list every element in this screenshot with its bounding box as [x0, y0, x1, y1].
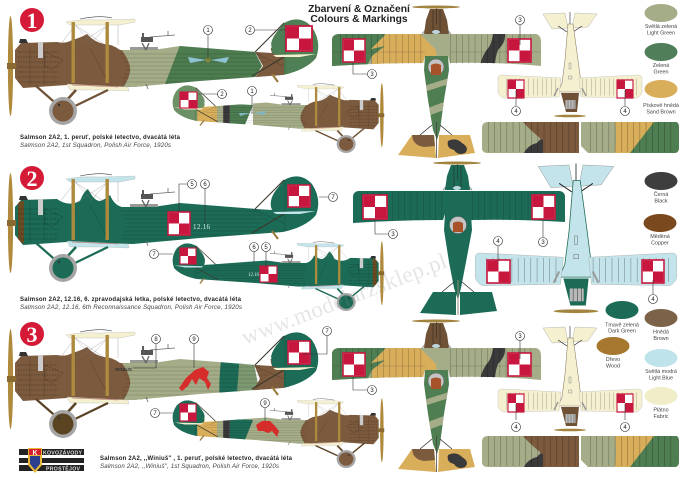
caption aircraft 1: [20, 135, 181, 149]
logo: Kovozávody Prostějov: [19, 448, 84, 473]
aircraft 1 top view: 3: [518, 18, 522, 24]
aircraft 1 insignia and callouts: [180, 26, 312, 116]
aircraft 3 small side view: [165, 394, 384, 468]
logo: Kovozávody Prostějov: KOVOZÁVODY: [43, 450, 83, 456]
colour swatches legend: Světlá modrá: [645, 369, 677, 375]
colour swatches legend: Sand Brown: [646, 110, 676, 116]
aircraft 1 insignia and callouts: 2: [220, 92, 224, 98]
colour swatches legend: Tmavě zelená: [605, 322, 639, 328]
caption aircraft 2: Salmson 2A2, 12.16, 6. zpravodajská letka, polské letectvo, dvacátá léta: [20, 297, 242, 303]
aircraft 2 small side view: [165, 237, 384, 311]
logo: Kovozávody Prostějov: K: [32, 450, 38, 457]
colour swatches legend: Světlá zelená: [645, 24, 677, 30]
aircraft 1 underside and wing panels: [482, 12, 679, 153]
caption aircraft 1: Salmson 2A2, 1st Squadron, Polish Air Force, 1920s: [20, 142, 171, 149]
colour swatches legend: Měděná: [650, 234, 670, 240]
aircraft 3 underside and wing panels: [482, 326, 679, 467]
aircraft 3 insignia: red bears and callouts: 7: [325, 329, 329, 335]
caption aircraft 3: Salmson 2A2, ,,Winiuš", 1st Squadron, Polish Air Force, 1920s: [100, 463, 279, 470]
aircraft 1 top view: 3: [370, 72, 374, 78]
watermark: www.modelarzsklep.pl: [238, 248, 450, 350]
colour swatches legend: Wood: [606, 364, 620, 370]
aircraft 2 insignia and callouts: 12.16: [193, 223, 210, 231]
colour swatches legend: Dark Green: [608, 328, 636, 334]
colour swatches legend: Pískově hnědá: [643, 103, 679, 109]
colour swatches legend: Copper: [651, 240, 669, 246]
colour swatches legend: Black: [654, 198, 668, 204]
aircraft 3 insignia: red bears and callouts: WINIUS: [115, 367, 132, 372]
aircraft 3 insignia: red bears and callouts: 9: [192, 337, 196, 343]
colour swatches legend: Hnědá: [653, 330, 669, 336]
caption aircraft 1: Salmson 2A2, 1. peruť, polské letectvo, dvacátá léta: [20, 135, 181, 141]
aircraft 3 insignia: red bears and callouts: 7: [153, 411, 157, 417]
aircraft 3 top view: 3: [370, 388, 374, 394]
badge: number 1: [20, 8, 44, 33]
colour swatches legend: Černá: [654, 191, 668, 198]
badge: number 3: 3: [26, 322, 38, 347]
aircraft 1 side view: [7, 10, 330, 125]
aircraft 3 insignia: red bears and callouts: 8: [154, 337, 158, 343]
aircraft 3 underside and wing panels: 4: [623, 425, 627, 431]
aircraft 3 insignia: red bears and callouts: 9: [263, 401, 267, 407]
colour swatches legend: [596, 4, 679, 420]
colour swatches legend: Zelená: [653, 63, 669, 69]
badge: number 2: 2: [26, 166, 38, 191]
colour swatches legend: Light Green: [647, 30, 675, 36]
aircraft 2 insignia and callouts: 6: [252, 245, 256, 251]
aircraft 2 insignia and callouts: 6: [203, 182, 207, 188]
logo: Kovozávody Prostějov: PROSTĚJOV: [46, 464, 81, 472]
caption aircraft 2: [20, 297, 242, 311]
aircraft 2 underside: 4: [651, 297, 655, 303]
aircraft 3 underside and wing panels: 4: [514, 425, 518, 431]
aircraft 3 top view: [330, 320, 545, 474]
aircraft 2 underside: [475, 164, 677, 313]
colour swatches legend: Green: [654, 70, 668, 76]
aircraft 1 insignia and callouts: 1: [250, 89, 254, 95]
colour swatches legend: Dřevo: [606, 357, 620, 363]
aircraft 1 top view: [330, 6, 545, 160]
aircraft 1 small side view: [165, 79, 384, 153]
caption aircraft 2: Salmson 2A2, 12.16, 6th Reconnaissance Squadron, Polish Air Force, 1920s: [20, 304, 242, 311]
badge: number 2: [20, 166, 44, 191]
aircraft 2 top view: 3: [541, 240, 545, 246]
aircraft 3 top view: 3: [518, 334, 522, 340]
aircraft 2 insignia and callouts: [150, 180, 338, 282]
aircraft 1 insignia and callouts: 1: [206, 28, 210, 34]
aircraft 2 top view: 3: [391, 232, 395, 238]
aircraft 2 underside: 4: [496, 239, 500, 245]
aircraft 2 insignia and callouts: 5: [264, 245, 268, 251]
title: Colours & Markings: [310, 14, 408, 25]
title: Zbarvení & Označení: [308, 4, 411, 15]
caption aircraft 3: [100, 456, 293, 470]
colour swatches legend: Brown: [653, 336, 669, 342]
aircraft 1 insignia and callouts: 2: [248, 28, 252, 34]
badge: number 3: [20, 322, 44, 347]
aircraft 2 insignia and callouts: 7: [152, 252, 156, 258]
aircraft 3 insignia: red bears and callouts: [115, 326, 332, 437]
aircraft 2 insignia and callouts: 7: [331, 195, 335, 201]
aircraft 3 side view: [7, 323, 330, 438]
colour swatches legend: Fabric: [654, 414, 669, 420]
aircraft 2 insignia and callouts: 5: [190, 182, 194, 188]
title: [308, 4, 411, 25]
badge: number 1: 1: [26, 8, 38, 33]
aircraft 2 side view: [7, 167, 330, 282]
colour swatches legend: Plátno: [653, 408, 669, 414]
aircraft 2 top view: [353, 162, 565, 315]
aircraft 1 underside and wing panels: 4: [514, 109, 518, 115]
aircraft 2 insignia and callouts: 12.16: [248, 273, 260, 278]
aircraft 1 underside and wing panels: 4: [623, 109, 627, 115]
caption aircraft 3: Salmson 2A2, ,,Winiuš" , 1. peruť, polské letectvo, dvacátá léta: [100, 456, 293, 462]
colour swatches legend: Light Blue: [649, 376, 673, 382]
